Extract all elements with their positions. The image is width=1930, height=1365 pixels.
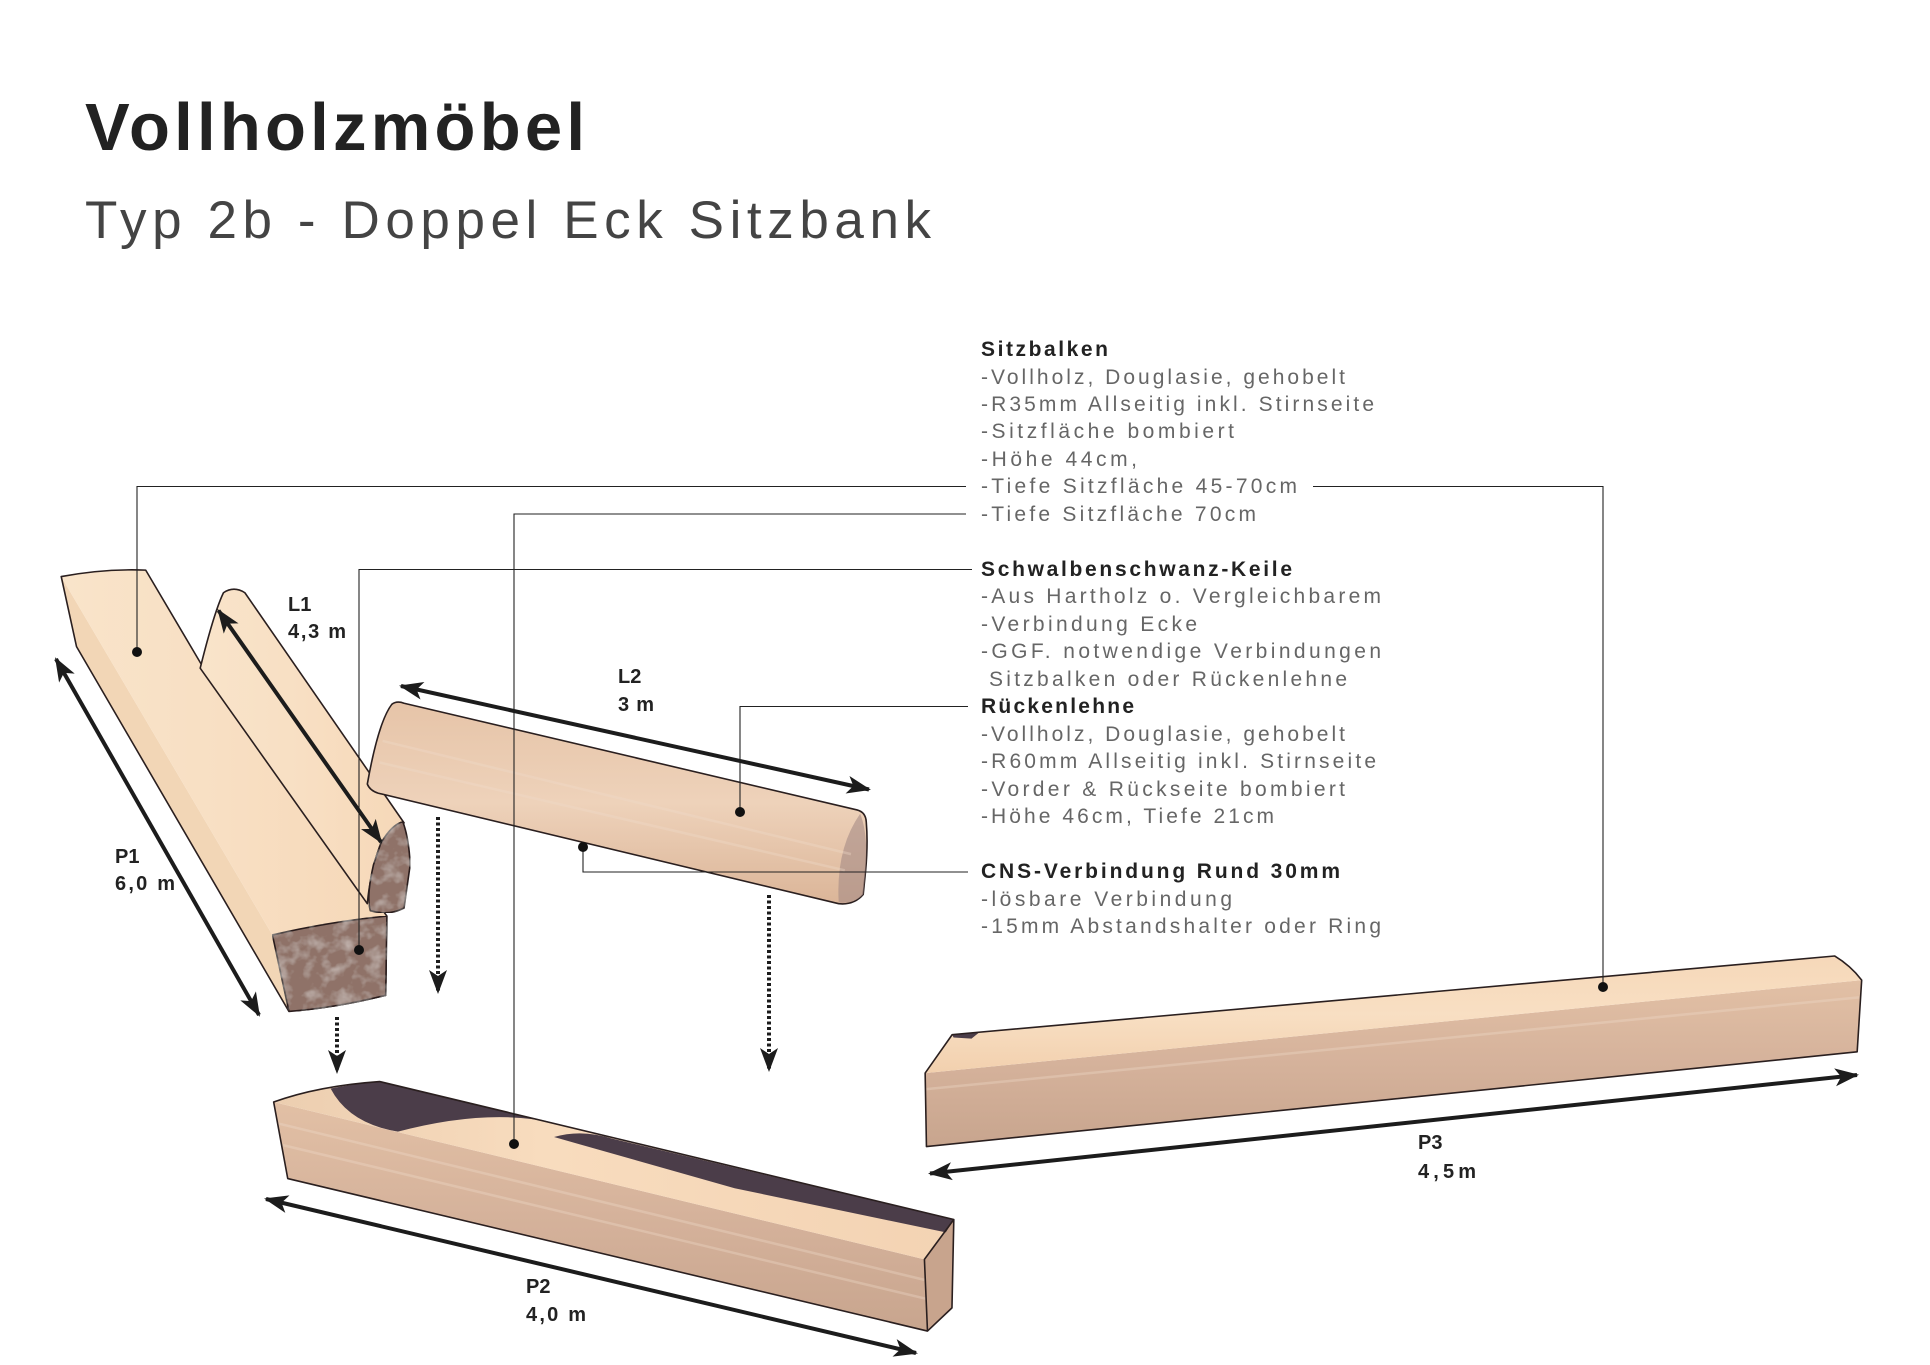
leader lines [137, 486, 1603, 1144]
beam P3 [925, 956, 1862, 1147]
dimension label L2: 3 m [618, 694, 654, 716]
dimension label L2: L2 [618, 666, 641, 688]
text block: Rückenlehne: -R60mm Allseitig inkl. Stirnseite [981, 750, 1376, 773]
text block: Schwalbenschwanz-Keile: Schwalbenschwanz-Keile [981, 558, 1292, 581]
dimension label L1 [288, 594, 346, 643]
dimension label P1: P1 [115, 846, 139, 868]
dimension label L1: 4,3 m [288, 621, 346, 643]
text block: Schwalbenschwanz-Keile [981, 558, 1381, 691]
dimension label P1: 6,0 m [115, 873, 175, 895]
dimension label P3: 4,5m [1418, 1161, 1476, 1183]
text block: Schwalbenschwanz-Keile: Sitzbalken oder Rückenlehne [989, 668, 1347, 691]
text block: Sitzbalken: -R35mm Allseitig inkl. Stirnseite [981, 393, 1374, 416]
dimension label L1: L1 [288, 594, 311, 616]
dimension label P2 [526, 1276, 586, 1326]
text block: Rückenlehne: Rückenlehne [981, 695, 1134, 718]
dimension label P3: P3 [1418, 1132, 1442, 1154]
text block: CNS-Verbindung: CNS-Verbindung Rund 30mm [981, 860, 1340, 883]
text block: Sitzbalken: -Höhe 44cm, [981, 448, 1137, 471]
text block: Rückenlehne: -Vorder & Rückseite bombiert [981, 778, 1345, 801]
beam P2 [274, 1082, 954, 1331]
dimension arrows [56, 610, 1857, 1353]
callout dots [132, 647, 1608, 1149]
text block: Sitzbalken: -Vollholz, Douglasie, gehobelt [981, 366, 1345, 389]
assembly arrows dotted [337, 817, 769, 1072]
text block: Rückenlehne: -Höhe 46cm, Tiefe 21cm [981, 805, 1274, 828]
beam L1 [200, 589, 410, 913]
text block: Schwalbenschwanz-Keile: -GGF. notwendige Verbindungen [981, 640, 1381, 663]
dimension label P2: 4,0 m [526, 1304, 586, 1326]
dimension label P1 [115, 846, 175, 895]
subtitle: Typ 2b - Doppel Eck Sitzbank [85, 191, 932, 250]
text block: Rückenlehne [981, 695, 1376, 828]
text block: Sitzbalken: Sitzbalken [981, 338, 1108, 361]
dimension label P2: P2 [526, 1276, 550, 1298]
text block: Rückenlehne: -Vollholz, Douglasie, gehobelt [981, 723, 1345, 746]
dimension label P3 [1418, 1132, 1476, 1183]
text block: Sitzbalken: -Sitzfläche bombiert [981, 420, 1234, 443]
text block: Sitzbalken [981, 338, 1374, 526]
cast shadows on P2 [331, 1082, 954, 1232]
text block: Sitzbalken: -Tiefe Sitzfläche 70cm [981, 503, 1256, 526]
text block: Sitzbalken: -Tiefe Sitzfläche 45-70cm [981, 475, 1297, 498]
dimension label L2 [618, 666, 654, 716]
beam L2 [367, 702, 867, 904]
text block: CNS-Verbindung [981, 860, 1381, 938]
text block: Schwalbenschwanz-Keile: -Verbindung Ecke [981, 613, 1197, 636]
text block: CNS-Verbindung: -lösbare Verbindung [981, 888, 1232, 911]
title: Vollholzmöbel [85, 90, 585, 165]
text block: Schwalbenschwanz-Keile: -Aus Hartholz o. Vergleichbarem [981, 585, 1381, 608]
text block: CNS-Verbindung: -15mm Abstandshalter oder Ring [981, 915, 1381, 938]
beam P1 [61, 570, 387, 1011]
